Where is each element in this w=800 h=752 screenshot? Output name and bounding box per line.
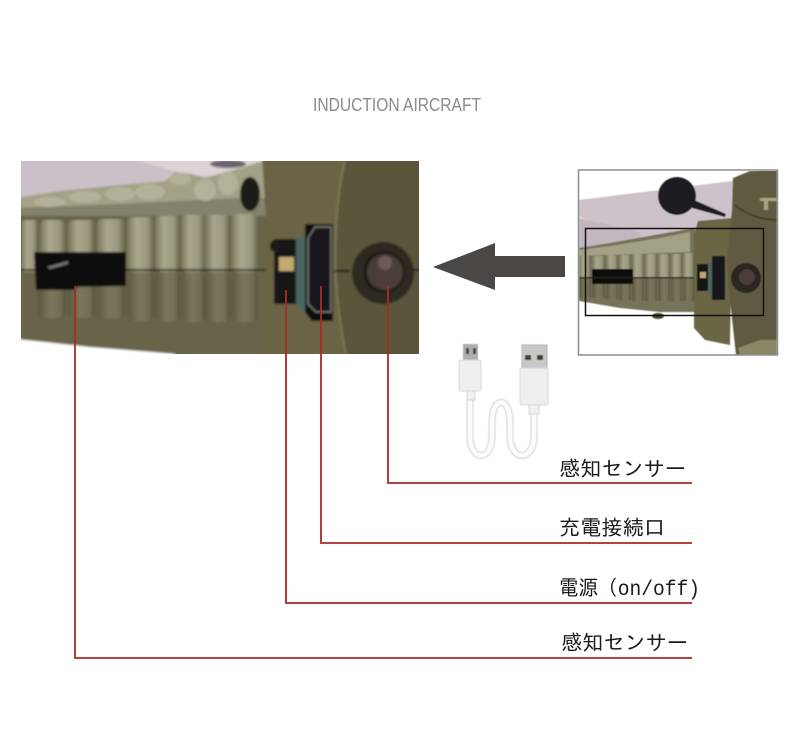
fuselage [579,228,697,312]
title: INDUCTION AIRCRAFT [313,95,481,115]
switch notch [269,240,276,252]
lower wing [579,218,640,248]
tan knob [700,272,706,278]
label: charging port: 充電接続口 [559,517,665,540]
hatch line [735,205,777,220]
lavender wing [579,180,740,240]
micro USB plug [463,344,478,360]
sensor glint [47,261,68,269]
upper ribs [21,214,258,272]
switch tan knob [279,257,294,271]
side plate [262,155,347,360]
antenna stem [692,200,726,217]
port outline [308,227,331,312]
rib hole [240,177,260,211]
sensor ring [352,242,414,304]
USB-A plug [522,345,547,369]
small tag [760,198,778,210]
label: front sensor: 感知センサー [559,458,686,481]
label: power switch: 電源（on/off) [559,577,700,602]
panel: small overview photo [579,170,778,355]
leader line: charging port [321,286,692,543]
teal port strip [295,234,308,312]
underside knob [652,313,664,319]
infographic canvas [21,98,778,659]
upper ribs [579,253,694,277]
small photo frame [578,170,778,355]
icon: USB cable [459,344,548,456]
fuselage crest [21,161,266,209]
port [712,256,725,300]
ball antenna [658,177,696,215]
lower white cutout [21,338,177,354]
leader line: front sensor [388,286,692,483]
arrow pointing to enlarged photo [433,243,565,290]
nose plate [335,155,425,360]
sensor lens [367,254,403,290]
pale wing edge [140,161,262,176]
zoom indicator rectangle [586,228,764,316]
leader line: power switch [286,290,692,603]
panel: enlarged photo of aircraft side [15,155,425,362]
power switch [274,239,296,304]
charging port [305,224,333,321]
seam line [15,269,271,271]
crest bumps [34,171,238,207]
front body [727,170,777,355]
lower ribs [579,278,694,301]
crest shadow band [21,198,266,217]
photo background [262,161,336,291]
cable [470,398,534,456]
power switch [697,264,708,291]
sensor window [592,269,633,284]
nose seam [334,270,350,272]
wing strut [210,160,246,168]
side plate [694,218,732,345]
crest highlight [579,232,690,256]
lower ribs [38,272,258,322]
leader line: rear sensor [75,286,692,658]
body lower band [15,216,266,360]
plate edge [335,161,346,354]
sensor [731,263,761,293]
sensor window [34,252,126,290]
teal strip [708,262,713,294]
label: rear sensor: 感知センサー [561,632,688,655]
side seam [579,277,777,278]
lower light edge [738,340,777,355]
lavender wing [21,161,212,198]
